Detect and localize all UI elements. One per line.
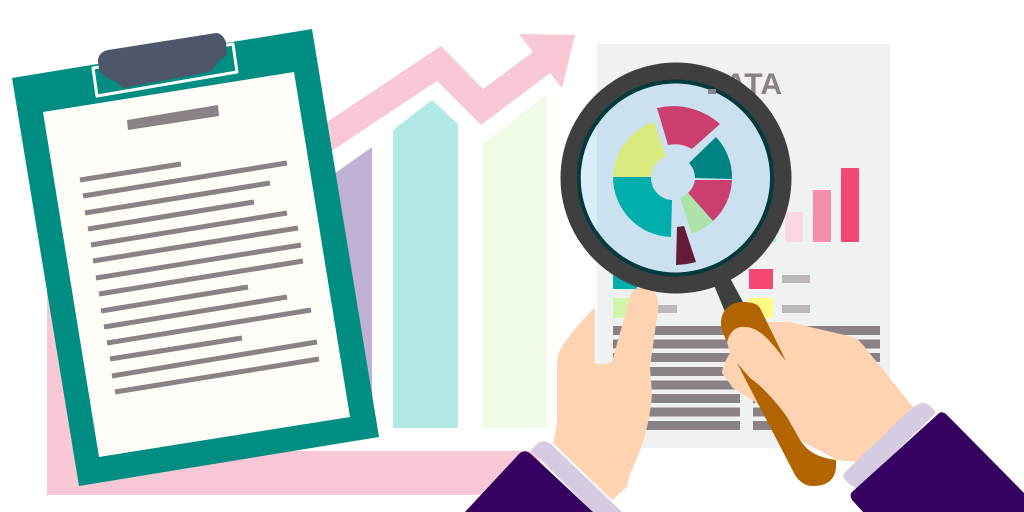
data report sheet (597, 44, 890, 448)
segment: yellow green (613, 122, 666, 177)
handle top over fingers (721, 302, 786, 361)
magnifier inner ring (577, 80, 774, 276)
magnifying glass (560, 62, 792, 312)
right hand (722, 322, 913, 462)
segment: dark teal (689, 137, 732, 179)
lens (581, 84, 770, 272)
segment: magenta right (688, 180, 732, 221)
document title bar (127, 105, 219, 130)
bar: aqua (393, 100, 458, 428)
left sleeve (465, 451, 593, 512)
heading fragment showing through lens (708, 89, 716, 94)
pink growth arrow and axis (47, 34, 575, 495)
left hand holding report (553, 288, 658, 500)
handle lower grip (737, 363, 836, 486)
segment: light green (680, 193, 713, 234)
report background (597, 44, 890, 448)
report table rows (613, 326, 880, 430)
clip (98, 33, 227, 88)
segment: magenta top (657, 106, 720, 149)
paper sheet (43, 72, 350, 457)
bar: pale green (482, 94, 547, 428)
right cuff (843, 403, 936, 489)
magnified radial pie chart (613, 106, 732, 265)
clipboard board (12, 29, 379, 486)
clip outline (93, 44, 237, 96)
left cuff (531, 441, 622, 512)
magnifier neck (712, 278, 744, 312)
report bar chart (757, 168, 859, 242)
magnifier handle (721, 302, 836, 486)
right sleeve (850, 412, 1024, 512)
document text lines (80, 163, 319, 392)
segment: maroon (676, 226, 696, 265)
magnifier outer ring (560, 62, 792, 294)
clipboard (12, 29, 379, 486)
bar: purple (290, 147, 372, 428)
segment: teal (613, 177, 672, 237)
lens left highlight (581, 125, 597, 231)
report heading: DATA (703, 68, 782, 101)
report legend (613, 269, 810, 318)
